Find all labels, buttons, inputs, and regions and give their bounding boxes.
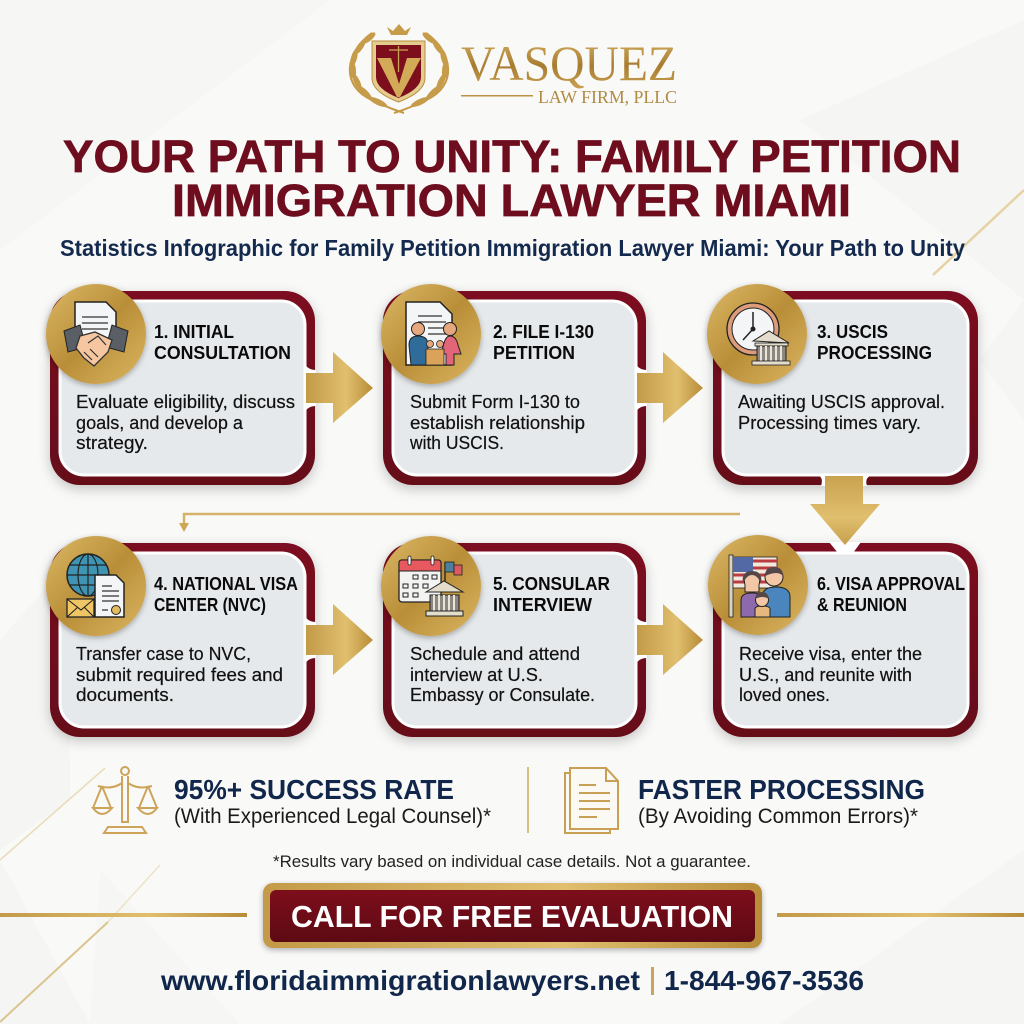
step 4 heading: CENTER (NVC)	[154, 595, 266, 615]
step 4 description: documents.	[76, 685, 174, 705]
step 2 heading: 2. FILE I-130	[493, 322, 594, 342]
step 5 description: Embassy or Consulate.	[410, 685, 595, 705]
step 1 heading: CONSULTATION	[154, 343, 291, 363]
arrow: step 1 to 2	[304, 352, 373, 423]
icon: scales	[93, 767, 157, 833]
logo wordmark: VASQUEZ	[461, 35, 677, 91]
website and phone	[160, 965, 864, 996]
step 6 heading: & REUNION	[817, 595, 907, 615]
panel: step 5	[383, 543, 646, 737]
icon: consultation handshake	[46, 284, 146, 384]
stat: success rate	[174, 774, 491, 828]
arrow: step 5 to 6	[635, 604, 703, 675]
panel: step 4	[50, 543, 315, 737]
step 3 description: Awaiting USCIS approval.	[738, 392, 945, 412]
subtitle: Statistics Infographic for Family Petition Immigration Lawyer Miami: Your Path to Unity	[60, 235, 965, 261]
panel: step 3	[713, 291, 978, 485]
step 6 description: loved ones.	[739, 685, 830, 705]
icon: clock and courthouse	[707, 284, 807, 384]
step 2 description: Submit Form I-130 to	[410, 392, 580, 412]
arrow: step 2 to 3	[635, 352, 703, 423]
step 4 description: submit required fees and	[76, 665, 283, 685]
step 2 description: with USCIS.	[409, 433, 504, 453]
call to action button: CALL FOR FREE EVALUATION	[291, 899, 733, 934]
step 3 heading: 3. USCIS	[817, 322, 888, 342]
step 6 heading: 6. VISA APPROVAL	[817, 574, 965, 594]
icon: documents	[565, 768, 618, 833]
website and phone: www.floridaimmigrationlawyers.net	[160, 965, 640, 996]
step 3 heading: PROCESSING	[817, 343, 932, 363]
step 1 description: goals, and develop a	[76, 413, 244, 433]
icon: globe, letter and document	[46, 536, 146, 636]
step 3 description: Processing times vary.	[738, 413, 921, 433]
step 2 heading: PETITION	[493, 343, 575, 363]
stat: faster processing	[638, 774, 925, 828]
title: IMMIGRATION LAWYER MIAMI	[172, 175, 851, 226]
icon: family and petition	[381, 284, 481, 384]
step 1 heading: 1. INITIAL	[154, 322, 234, 342]
arrow: step 4 to 5	[304, 604, 373, 675]
step 1 description: Evaluate eligibility, discuss	[76, 392, 295, 412]
title	[63, 131, 961, 226]
step 1 description: strategy.	[76, 433, 148, 453]
panel: step 2	[383, 291, 646, 485]
stat: success rate: (With Experienced Legal Counsel)*	[174, 805, 491, 828]
arrow: step 3 to 6	[810, 475, 880, 553]
logo	[349, 24, 677, 113]
logo emblem	[349, 24, 449, 113]
step 4 description: Transfer case to NVC,	[76, 644, 251, 664]
title: YOUR PATH TO UNITY: FAMILY PETITION	[63, 131, 961, 182]
step 5 description: interview at U.S.	[410, 665, 543, 685]
stat: success rate: 95%+ SUCCESS RATE	[174, 774, 454, 805]
connector line to step 4	[179, 514, 740, 532]
step 6 description: Receive visa, enter the	[739, 644, 922, 664]
call to action button	[0, 883, 1024, 948]
divider	[527, 767, 529, 833]
panel: step 6	[713, 543, 978, 737]
step 5 heading: INTERVIEW	[493, 595, 592, 615]
step 4 heading: 4. NATIONAL VISA	[154, 574, 298, 594]
icon: calendar and embassy	[381, 536, 481, 636]
disclaimer: *Results vary based on individual case details. Not a guarantee.	[273, 852, 751, 871]
step 5 description: Schedule and attend	[410, 644, 580, 664]
step 2 description: establish relationship	[410, 413, 585, 433]
stat: faster processing: FASTER PROCESSING	[638, 774, 925, 805]
step 6 description: U.S., and reunite with	[739, 665, 912, 685]
step 5 heading: 5. CONSULAR	[493, 574, 610, 594]
website and phone: 1-844-967-3536	[664, 965, 864, 996]
logo tagline: LAW FIRM, PLLC	[538, 87, 677, 107]
panel: step 1	[50, 291, 315, 485]
stat: faster processing: (By Avoiding Common Errors)*	[638, 805, 918, 828]
icon: family and US flag	[708, 535, 808, 635]
